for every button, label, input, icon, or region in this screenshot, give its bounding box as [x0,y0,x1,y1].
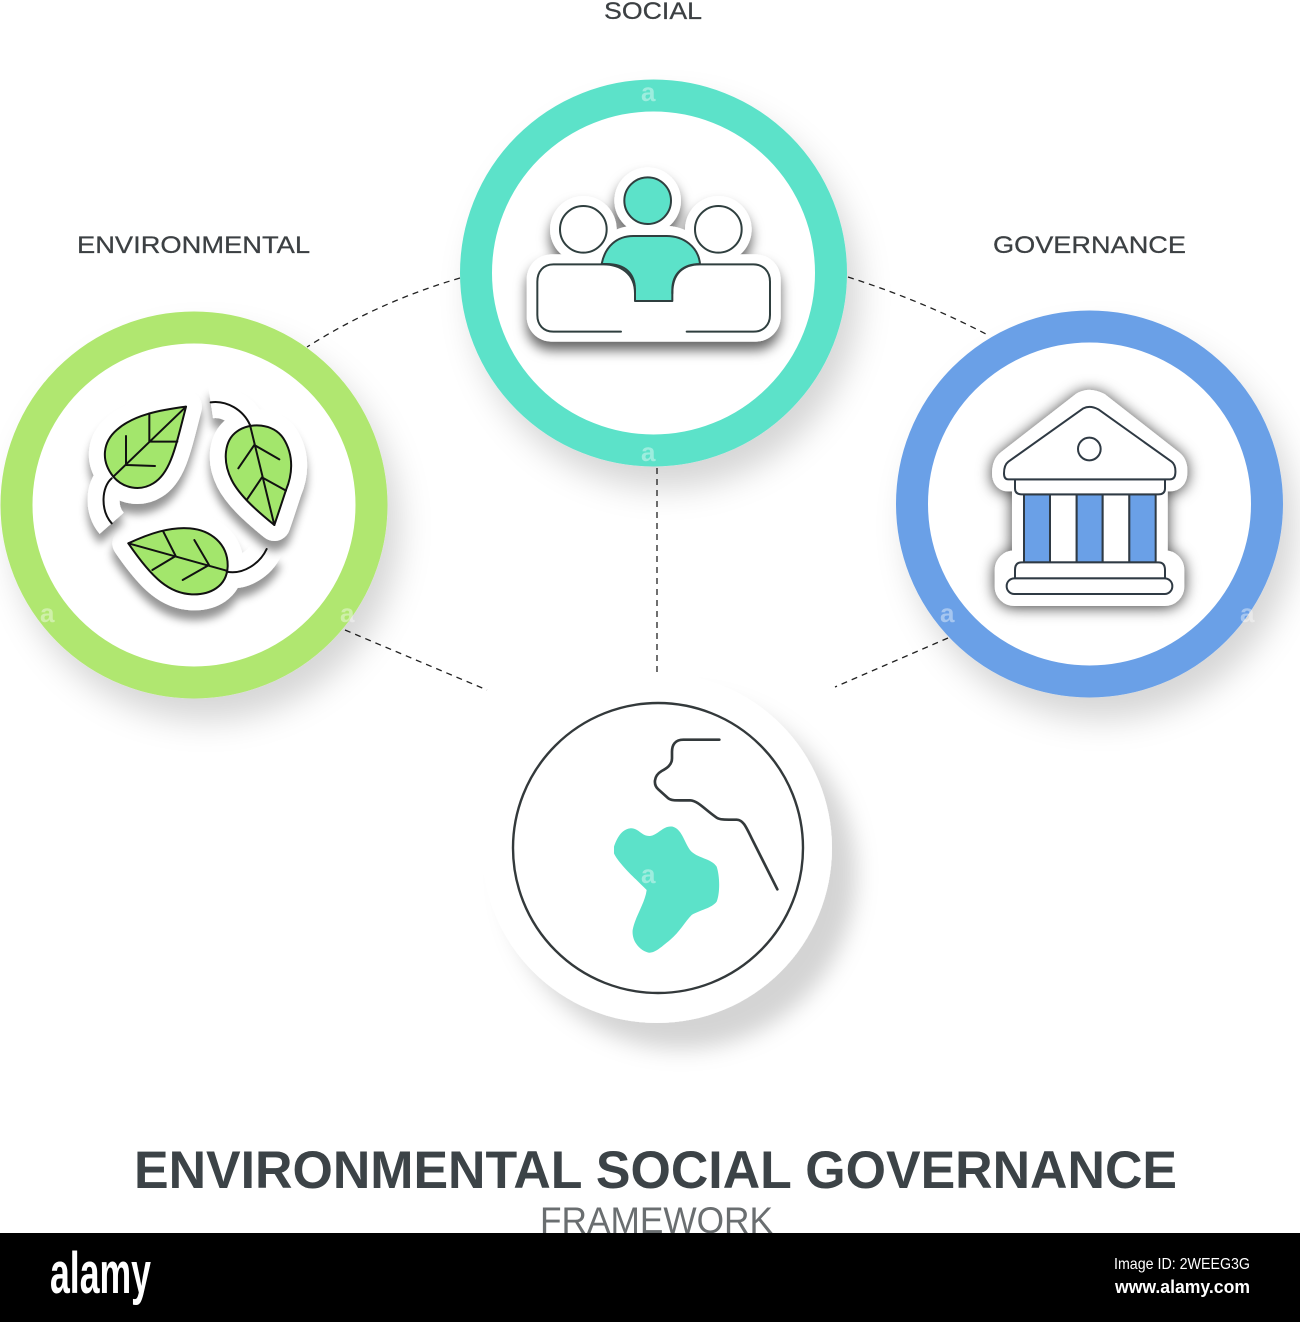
label: environmental: ENVIRONMENTAL [77,232,310,259]
website: www.alamy.com [1114,1277,1250,1297]
icon: classical building [1004,402,1175,594]
icon: three people [527,167,781,342]
teal ring [476,96,831,450]
green ring [16,328,372,682]
title: ENVIRONMENTAL SOCIAL GOVERNANCE [134,1141,1177,1200]
label: governance: GOVERNANCE [993,232,1186,259]
connector: governance to earth [835,638,948,687]
connector: environmental to earth [345,630,487,690]
blue ring [912,326,1267,682]
watermark marks: a [641,859,656,889]
watermark marks: a [641,437,656,467]
watermark marks: a [340,598,355,628]
icon: continents [614,740,777,953]
panel: governance [912,326,1267,682]
icon: three leaves recycling [104,402,291,594]
watermark marks: a [40,598,55,628]
white disc with shadow [482,673,832,1023]
footer bar [0,1233,1300,1322]
image id: Image ID: 2WEEG3G [1114,1256,1250,1273]
watermark marks [40,77,1255,889]
connector: social to earth [656,468,658,673]
globe outline [513,703,803,993]
footer logo: alamy [50,1241,151,1306]
connector: social to governance [848,277,986,334]
panel: environmental [16,328,372,682]
connector: social to environmental [307,278,460,347]
panel: social [476,96,831,450]
subtitle: FRAMEWORK [540,1200,773,1241]
watermark marks: a [1240,598,1255,628]
panel: earth globe [482,673,832,1023]
watermark marks: a [940,598,955,628]
watermark marks: a [641,77,656,107]
